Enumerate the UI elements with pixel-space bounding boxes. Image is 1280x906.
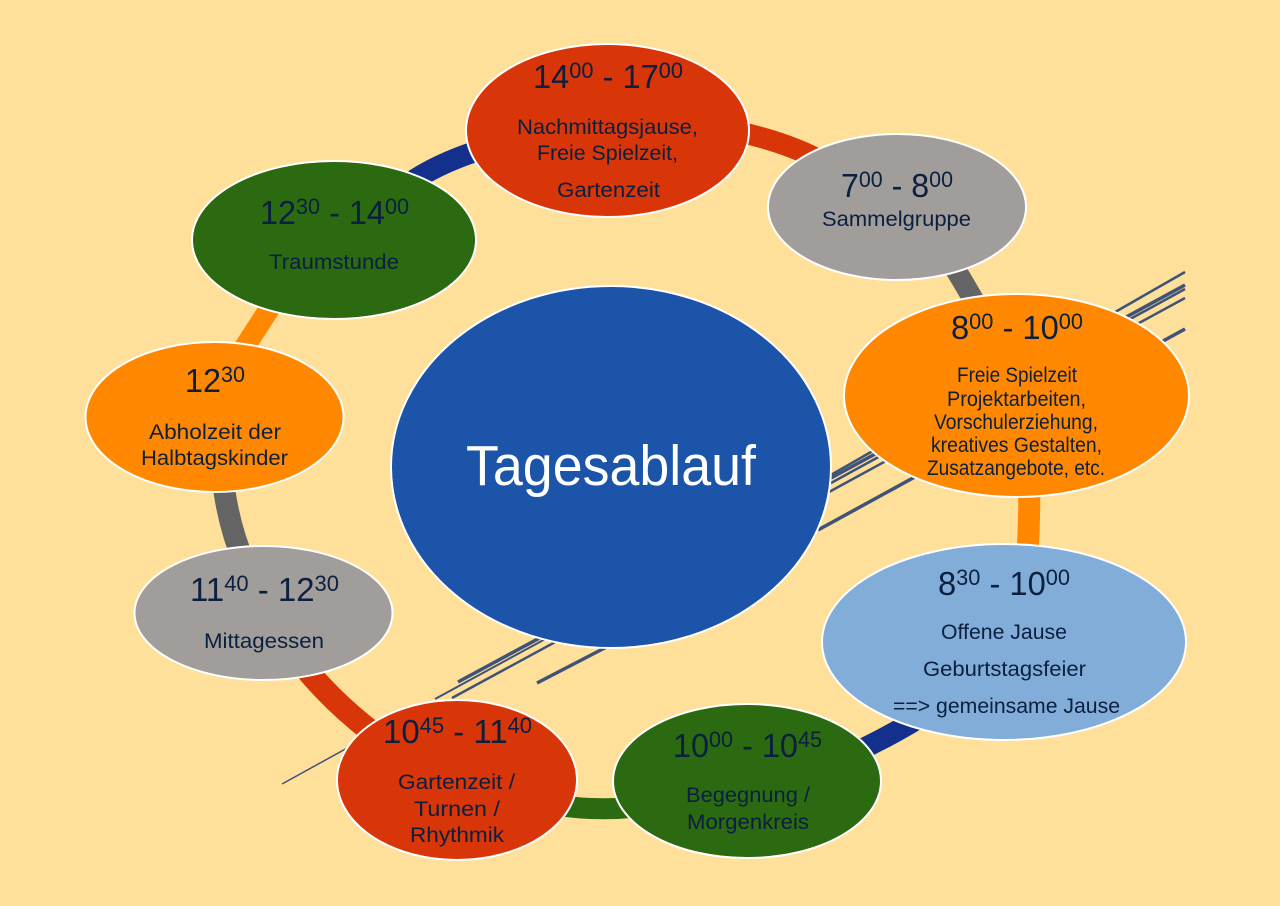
stage: 8.30-10 Offene Jause: Geburtstagsfeier (923, 658, 1086, 681)
stage: 10-10.45 Begegnung (613, 704, 881, 858)
stage: 10.45-11.40 Gartenzeit: 40 (508, 713, 532, 738)
stage: 8.30-10 Offene Jause: Offene Jause (941, 621, 1067, 644)
ring segments connecting the schedule stages (222, 131, 1029, 809)
stage: 11.40-12.30 Mittagessen (134, 546, 392, 680)
stage: 12.30-14 Traumstunde: 00 (385, 194, 409, 219)
stage: 8-10 Freie Spielzeit: Vorschulerziehung, (934, 411, 1098, 434)
stage: 14-17 Nachmittagsjause: Gartenzeit (557, 179, 660, 202)
stage: 10.45-11.40 Gartenzeit (337, 700, 577, 860)
stage: 7-8 Sammelgruppe: - 8 (883, 167, 929, 204)
stage: 10-10.45 Begegnung: 00 (709, 727, 733, 752)
stage: 10-10.45 Begegnung: - 10 (733, 727, 798, 764)
stage: 7-8 Sammelgruppe: Sammelgruppe (822, 208, 971, 231)
stage: 11.40-12.30 Mittagessen: - 12 (249, 571, 315, 608)
stage: 10.45-11.40 Gartenzeit: - 11 (444, 713, 508, 750)
stage: 8.30-10 Offene Jause: 00 (1046, 565, 1070, 590)
stage: 7-8 Sammelgruppe (768, 134, 1026, 280)
stage: 11.40-12.30 Mittagessen: 40 (224, 571, 249, 596)
stage: 11.40-12.30 Mittagessen: 30 (315, 571, 339, 596)
stage: 8-10 Freie Spielzeit (844, 294, 1189, 497)
stage: 14-17 Nachmittagsjause: 00 (569, 58, 594, 83)
stage: 10.45-11.40 Gartenzeit: 45 (420, 713, 444, 738)
stage: 11.40-12.30 Mittagessen: Mittagessen (204, 630, 324, 653)
stage: 7-8 Sammelgruppe: 00 (929, 167, 953, 192)
stage: 12.30-14 Traumstunde: 12 (260, 194, 297, 231)
stage: 14-17 Nachmittagsjause: - 17 (594, 58, 659, 95)
stage: 14-17 Nachmittagsjause: 00 (659, 58, 683, 83)
stage: 7-8 Sammelgruppe: 7 (841, 167, 859, 204)
stage: 14-17 Nachmittagsjause: Nachmittagsjause, (517, 116, 698, 139)
stage: 12.30 Abholzeit: 30 (221, 362, 245, 387)
stage: 12.30-14 Traumstunde: 30 (296, 194, 320, 219)
stage: 7-8 Sammelgruppe: 00 (859, 167, 883, 192)
stage: 8.30-10 Offene Jause: ==> gemeinsame Jause (893, 695, 1120, 718)
stage: 10-10.45 Begegnung: 10 (673, 727, 710, 764)
stage: 8-10 Freie Spielzeit: 00 (969, 309, 993, 334)
stage: 8-10 Freie Spielzeit: 00 (1059, 309, 1083, 334)
stage: 14-17 Nachmittagsjause (466, 44, 749, 217)
stage: 10.45-11.40 Gartenzeit: Rhythmik (410, 824, 505, 847)
stage: 10-10.45 Begegnung: 45 (798, 727, 822, 752)
diagonal decorative line bundles (282, 272, 1185, 784)
stage: 12.30 Abholzeit: Halbtagskinder (141, 447, 288, 470)
stage: 12.30-14 Traumstunde (192, 161, 476, 319)
stage: 8.30-10 Offene Jause: 30 (956, 565, 980, 590)
stage: 12.30-14 Traumstunde: - 14 (320, 194, 385, 231)
stage: 10-10.45 Begegnung: Morgenkreis (687, 811, 809, 834)
stage: 10-10.45 Begegnung: Begegnung / (686, 784, 810, 807)
stage: 8-10 Freie Spielzeit: Freie Spielzeit (957, 364, 1077, 387)
stage: 8.30-10 Offene Jause (822, 544, 1186, 740)
stage: 8-10 Freie Spielzeit: kreatives Gestalten, (931, 434, 1102, 457)
stage: 8.30-10 Offene Jause: - 10 (980, 565, 1046, 602)
stage: 8-10 Freie Spielzeit: Projektarbeiten, (947, 388, 1086, 411)
stage: 12.30 Abholzeit (86, 342, 344, 492)
stage: 8.30-10 Offene Jause: 8 (938, 565, 956, 602)
stage: 12.30 Abholzeit: Abholzeit der (149, 421, 281, 444)
stage: 10.45-11.40 Gartenzeit: 10 (383, 713, 420, 750)
stage: 14-17 Nachmittagsjause: Freie Spielzeit, (537, 142, 678, 165)
stage: 11.40-12.30 Mittagessen: 11 (190, 571, 224, 608)
stage: 10.45-11.40 Gartenzeit: Gartenzeit / (398, 771, 515, 794)
stage: 8-10 Freie Spielzeit: Zusatzangebote, etc. (927, 457, 1105, 480)
stage: 10.45-11.40 Gartenzeit: Turnen / (414, 798, 500, 821)
stage: 8-10 Freie Spielzeit: 8 (951, 309, 969, 346)
stage: 8-10 Freie Spielzeit: - 10 (993, 309, 1059, 346)
central circle: Tagesablauf: Tagesablauf (466, 434, 756, 498)
stage: 14-17 Nachmittagsjause: 14 (533, 58, 570, 95)
stage: 12.30 Abholzeit: 12 (185, 362, 222, 399)
stage: 12.30-14 Traumstunde: Traumstunde (269, 251, 399, 274)
central circle: Tagesablauf (391, 286, 831, 648)
